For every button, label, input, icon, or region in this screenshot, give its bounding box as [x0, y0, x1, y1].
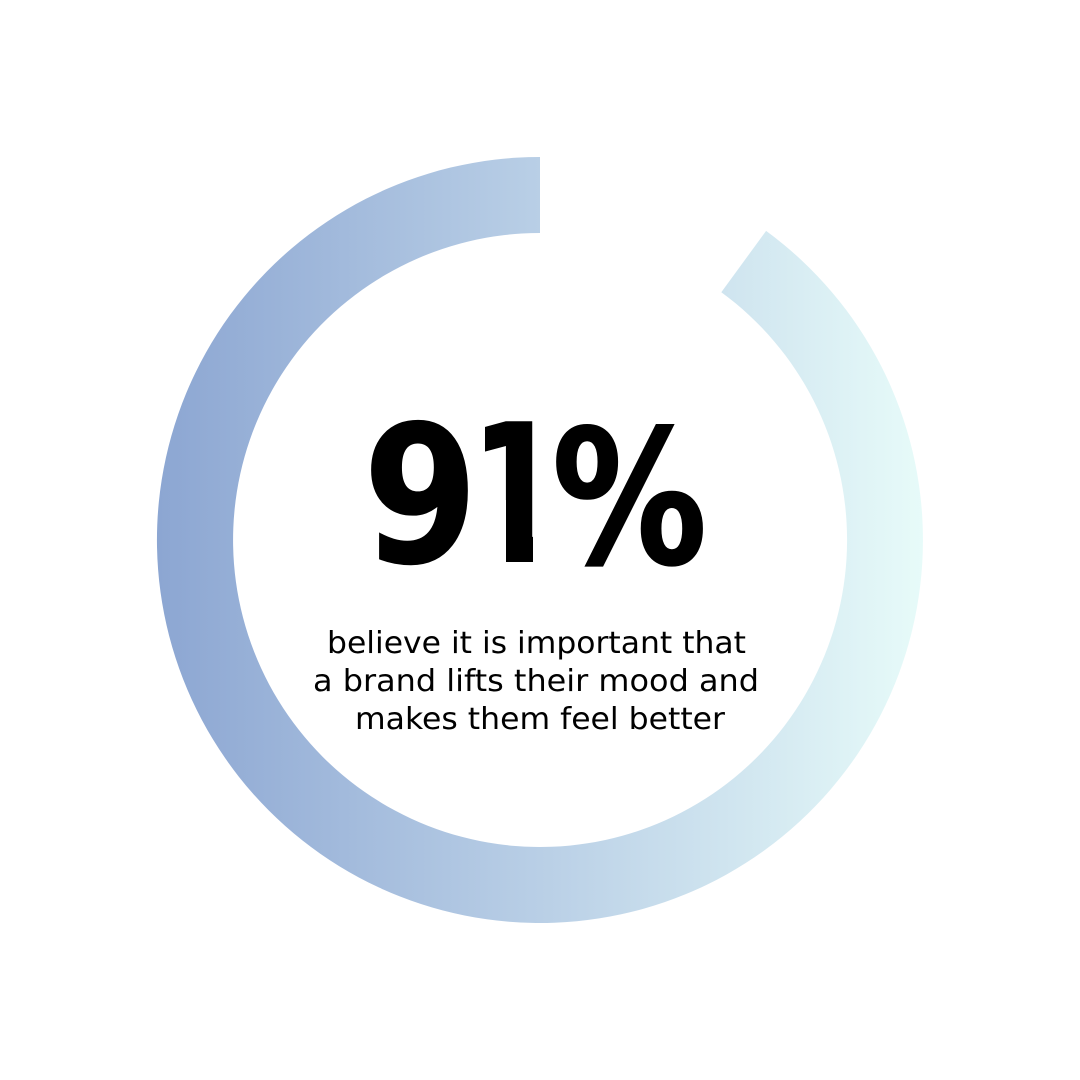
- big number: 91%: 9: [363, 386, 478, 608]
- big number: 91%: 1: [464, 383, 567, 608]
- description text: believe it is important that: [327, 626, 746, 661]
- donut chart: 91% ring: [157, 157, 923, 923]
- description text: [313, 626, 759, 737]
- description text: a brand lifts their mood and: [313, 664, 759, 699]
- big number: 91%: %: [552, 390, 707, 607]
- big number: 91%: [363, 383, 707, 608]
- description text: makes them feel better: [355, 702, 726, 737]
